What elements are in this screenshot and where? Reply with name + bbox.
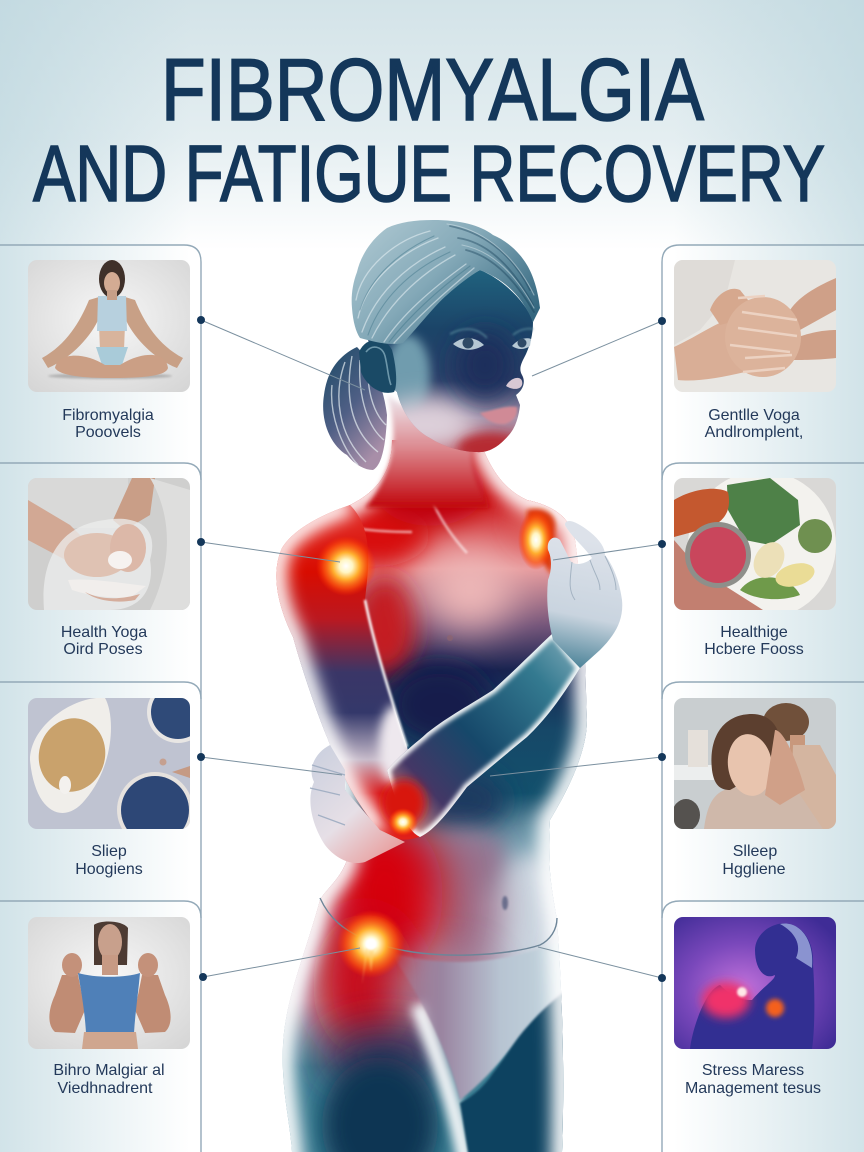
lips — [480, 407, 517, 424]
pain glow: hip — [337, 910, 405, 985]
label: Health Yoga — [61, 624, 147, 641]
panel: hands on abdomen — [674, 260, 836, 441]
panel: food bowls — [28, 698, 190, 878]
panel: healthy food plate — [674, 471, 836, 658]
panel frames — [0, 245, 864, 1152]
label: Viedhnadrent — [58, 1080, 153, 1097]
hair bun — [323, 347, 387, 470]
label: Healthige — [720, 624, 788, 641]
upper hand — [547, 521, 622, 668]
nipple — [447, 635, 453, 641]
panel: stress management figure — [674, 917, 836, 1097]
label: Slleep — [733, 843, 777, 860]
pain glow: left shoulder — [316, 536, 376, 596]
face — [368, 270, 533, 462]
waistband — [320, 898, 557, 955]
hair — [352, 220, 540, 344]
panel: stretching woman — [28, 917, 190, 1097]
pain glow: right shoulder — [518, 509, 555, 575]
connector dots — [197, 316, 666, 982]
connectors — [201, 320, 662, 978]
nose — [506, 378, 522, 389]
label: Management tesus — [685, 1080, 821, 1097]
navel — [502, 896, 508, 910]
neck — [365, 395, 490, 508]
eyes — [453, 338, 484, 350]
ear — [359, 340, 396, 393]
torso and legs — [283, 440, 587, 1152]
label: Bihro Malgiar al — [53, 1062, 165, 1079]
title: FIBROMYALGIA — [161, 40, 704, 139]
label: Sliep — [91, 843, 127, 860]
title — [33, 40, 825, 218]
label: Hcbere Fooss — [704, 641, 804, 658]
panel: hands — [28, 478, 190, 658]
label: Pooovels — [75, 424, 141, 441]
label: Gentlle Voga — [708, 407, 800, 424]
figure: human body with pain points — [276, 220, 622, 1152]
panel: yoga pose — [28, 260, 190, 441]
label: Hggliene — [722, 861, 786, 878]
upper arm — [276, 505, 425, 840]
label: Andlromplent, — [705, 424, 803, 441]
label: Stress Maress — [702, 1062, 804, 1079]
label: Fibromyalgia — [62, 407, 154, 424]
lower hand — [310, 745, 405, 863]
panel: stressed couple — [672, 698, 836, 878]
label: Hoogiens — [75, 861, 143, 878]
label: Oird Poses — [63, 641, 143, 658]
forearm — [382, 633, 580, 837]
